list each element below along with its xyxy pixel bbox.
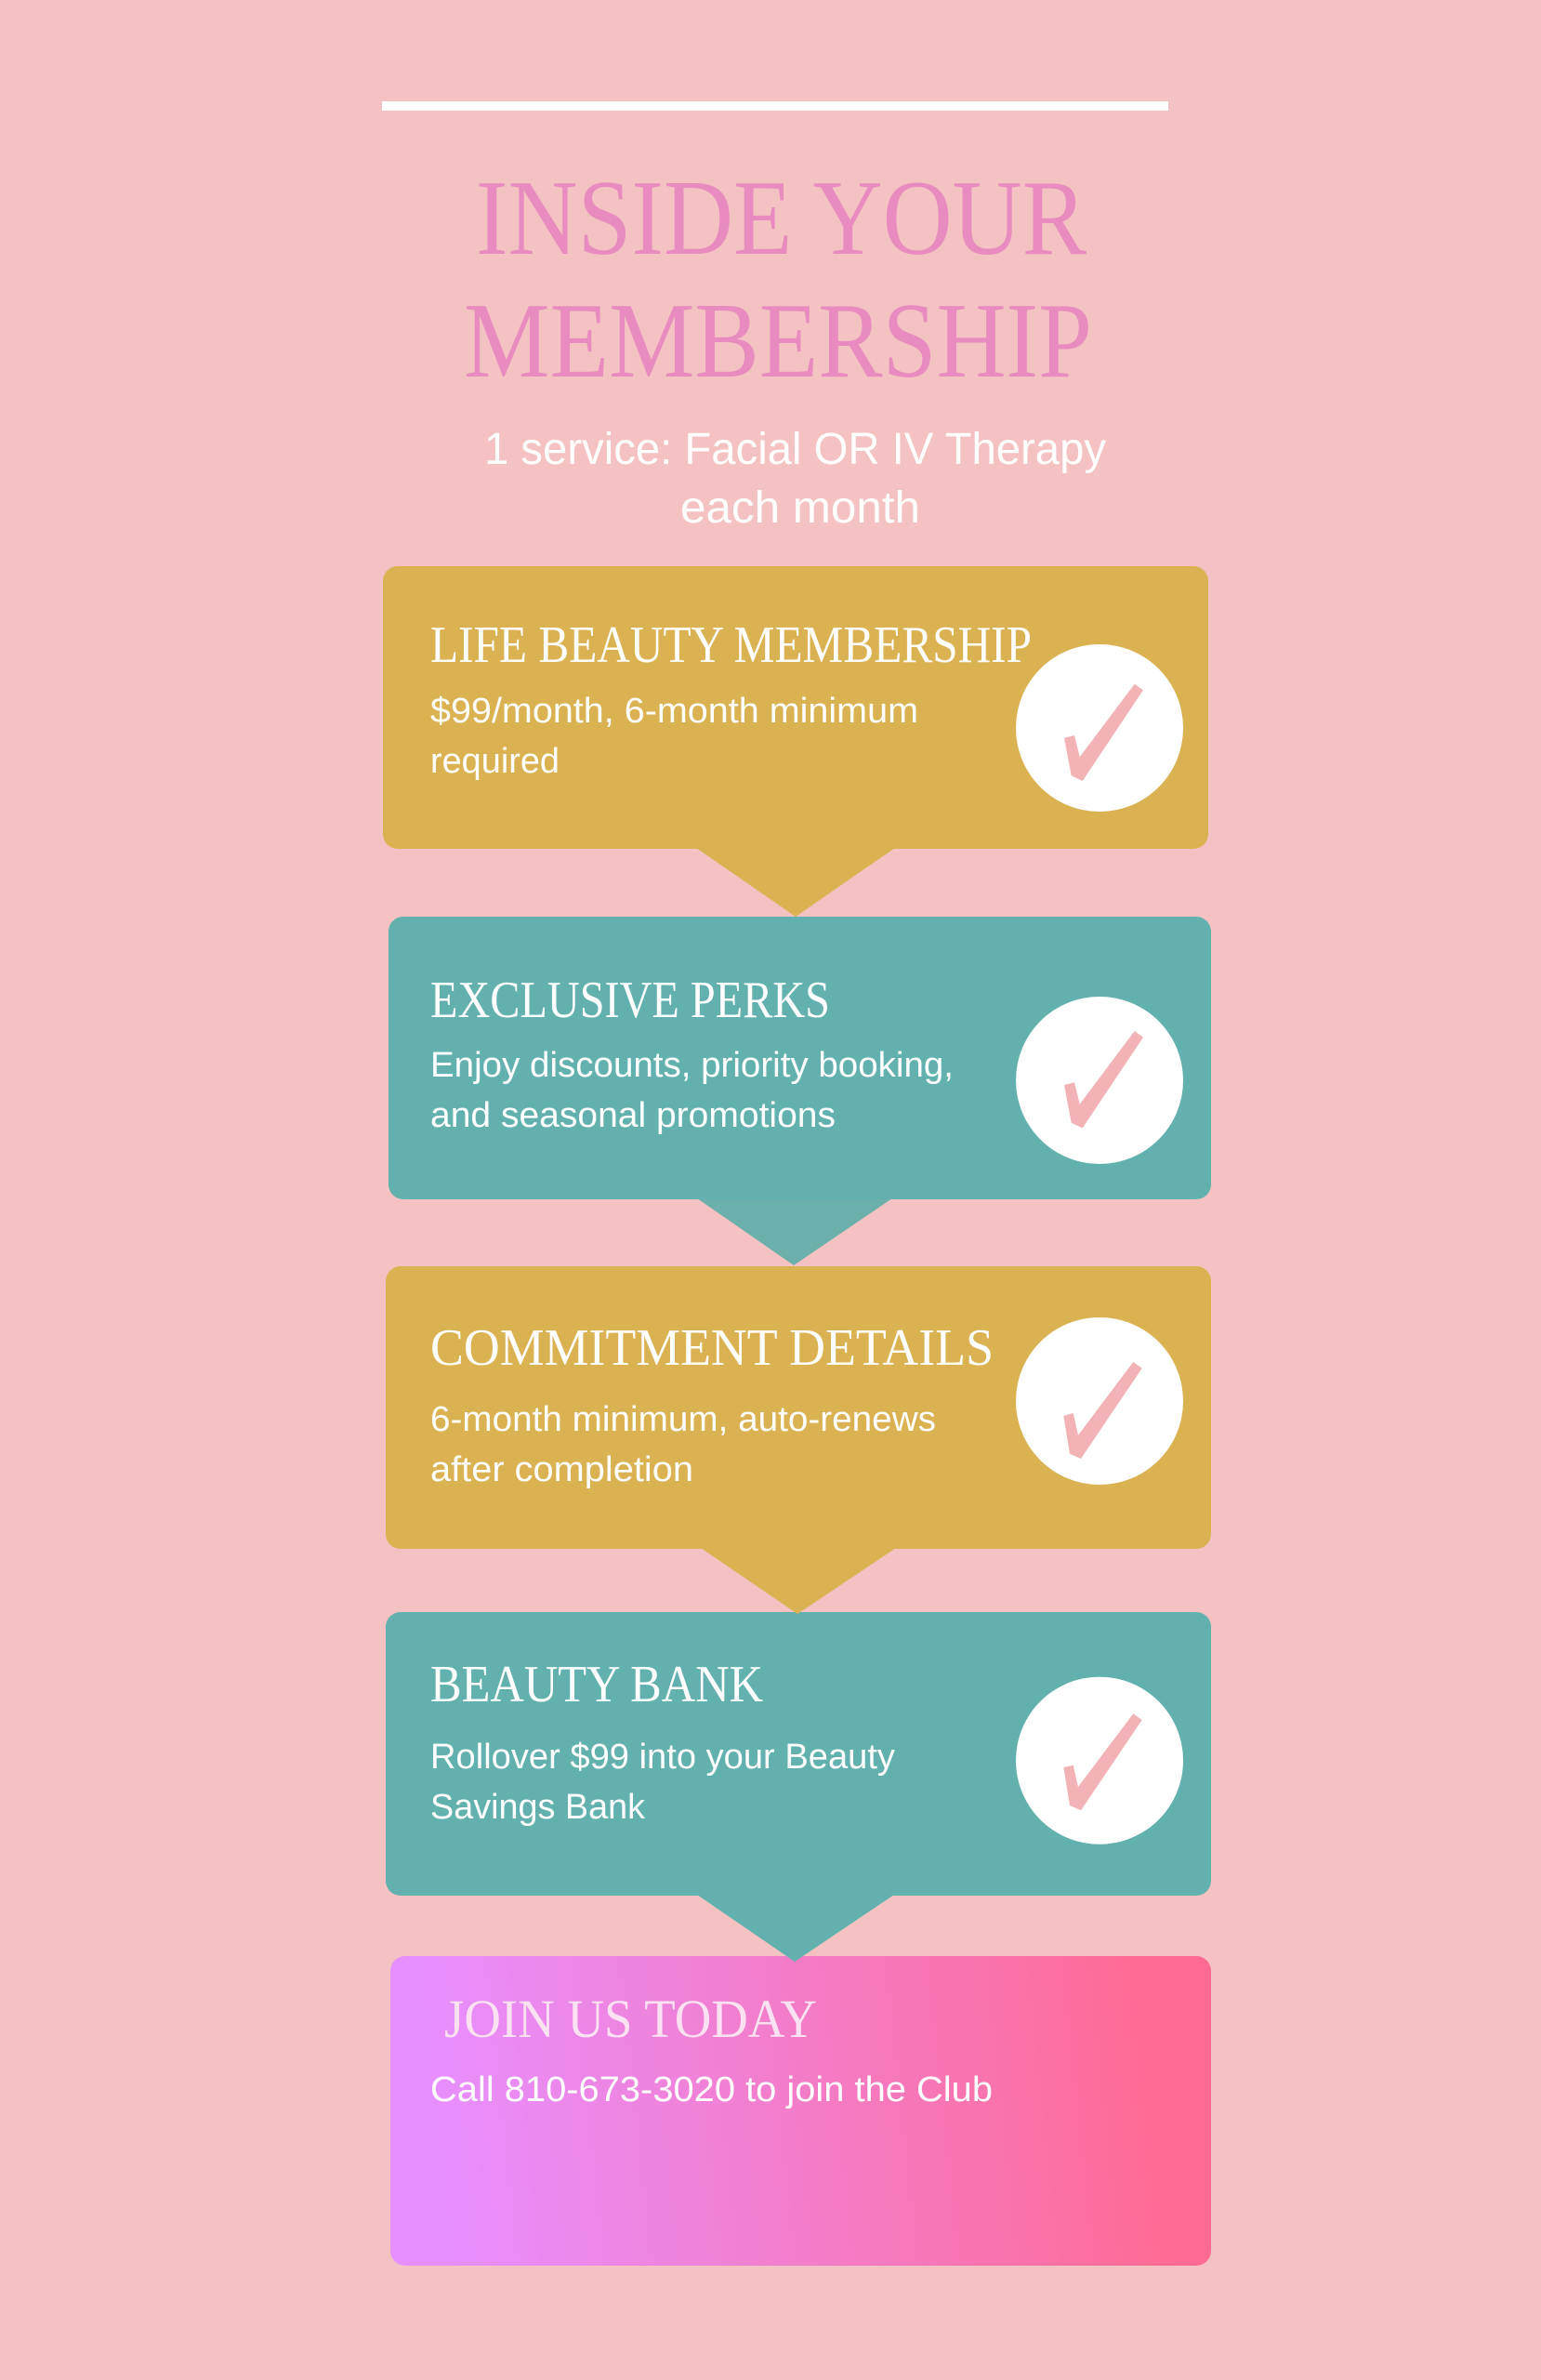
body text: Call 810-673-3020 to join the Club	[430, 2070, 993, 2109]
heading: EXCLUSIVE PERKS	[430, 972, 830, 1029]
panel: beauty bank	[386, 1612, 1211, 1896]
panel: join us today	[390, 1956, 1211, 2266]
icon: check circle	[1016, 997, 1183, 1164]
heading: LIFE BEAUTY MEMBERSHIP	[430, 616, 1032, 674]
top white bar	[382, 101, 1168, 111]
icon: check circle	[1016, 644, 1183, 812]
card background	[386, 1266, 1211, 1549]
card background	[386, 1612, 1211, 1896]
heading: COMMITMENT DETAILS	[430, 1319, 994, 1377]
panel: exclusive perks	[389, 917, 1211, 1265]
title: MEMBERSHIP	[464, 282, 1092, 401]
arrow: gold pointer 1	[696, 848, 895, 917]
panel: life beauty membership	[383, 566, 1208, 917]
title: INSIDE YOUR	[476, 159, 1087, 278]
body text: Enjoy discounts, priority booking,	[430, 1046, 954, 1085]
heading: JOIN US TODAY	[444, 1989, 817, 2049]
title	[464, 159, 1092, 401]
panel: commitment details	[386, 1266, 1211, 1549]
body text: Savings Bank	[430, 1788, 646, 1827]
body text: Rollover $99 into your Beauty	[430, 1738, 895, 1777]
body text: required	[430, 742, 560, 781]
arrow: gold pointer 3	[701, 1548, 896, 1614]
card background	[390, 1956, 1211, 2266]
subtitle: 1 service: Facial OR IV Therapy	[484, 425, 1106, 474]
arrow: teal pointer 2	[697, 1198, 892, 1265]
body text: 6-month minimum, auto-renews	[430, 1400, 936, 1439]
body text	[430, 1046, 954, 1135]
arrow: teal pointer 4	[697, 1895, 894, 1962]
body text: after completion	[430, 1450, 693, 1489]
heading: BEAUTY BANK	[430, 1656, 763, 1713]
body text	[430, 692, 918, 781]
body text: and seasonal promotions	[430, 1096, 836, 1135]
card background	[389, 917, 1211, 1199]
subtitle	[484, 425, 1106, 533]
subtitle: each month	[680, 483, 920, 533]
body text	[430, 1738, 895, 1827]
card background	[383, 566, 1208, 849]
body text: $99/month, 6-month minimum	[430, 692, 918, 731]
body text	[430, 1400, 936, 1489]
icon: check circle	[1016, 1677, 1183, 1844]
icon: check circle	[1016, 1317, 1183, 1485]
